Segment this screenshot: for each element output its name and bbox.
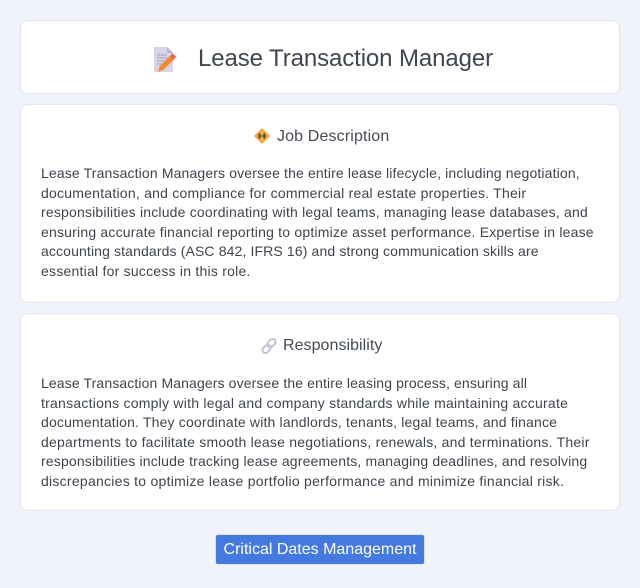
panel: job description: [20, 104, 620, 303]
icon: diamond sign: [254, 128, 270, 144]
heading: job description: Job Description: [277, 128, 389, 144]
text: responsibility: departments to facilitate smooth lease negotiations, renewals, and terminations. Their: [41, 434, 590, 450]
icon: chain link: [262, 338, 276, 354]
text: responsibility: transactions comply with legal and company standards while maintaining accurate: [41, 395, 568, 411]
text: job description: documentation, and compliance for commercial real estate properties. Their: [41, 185, 526, 201]
button: critical dates management: Critical Dates Management: [224, 541, 416, 558]
button: critical dates management: [215, 534, 425, 565]
heading: responsibility: Responsibility: [283, 336, 382, 354]
text: job description: [41, 165, 594, 279]
text: job description: ensuring accurate financial reporting to optimize asset performance. Expertise in lease: [41, 224, 594, 240]
panel: responsibility: [20, 313, 620, 511]
text: job description: Lease Transaction Managers oversee the entire lease lifecycle, including negotiation,: [41, 165, 580, 181]
text: responsibility: documentation. They coordinate with landlords, tenants, legal teams, and finance: [41, 414, 557, 430]
text: responsibility: discrepancies to optimize lease portfolio performance and minimize financial risk.: [41, 473, 564, 489]
text: responsibility: [41, 375, 590, 489]
text: job description: accounting standards (ASC 842, IFRS 16) and strong communication skills are: [41, 243, 539, 259]
text: responsibility: Lease Transaction Managers oversee the entire leasing process, ensuring all: [41, 375, 527, 391]
title: Lease Transaction Manager: [198, 45, 493, 72]
text: job description: essential for success in this role.: [41, 263, 251, 279]
text: job description: responsibilities include coordinating with legal teams, managing lease databases, and: [41, 204, 588, 220]
icon: document with pencil: [154, 47, 176, 72]
text: responsibility: responsibilities include tracking lease agreements, managing deadlines, and resolving: [41, 453, 587, 469]
panel: title card: [20, 20, 620, 94]
